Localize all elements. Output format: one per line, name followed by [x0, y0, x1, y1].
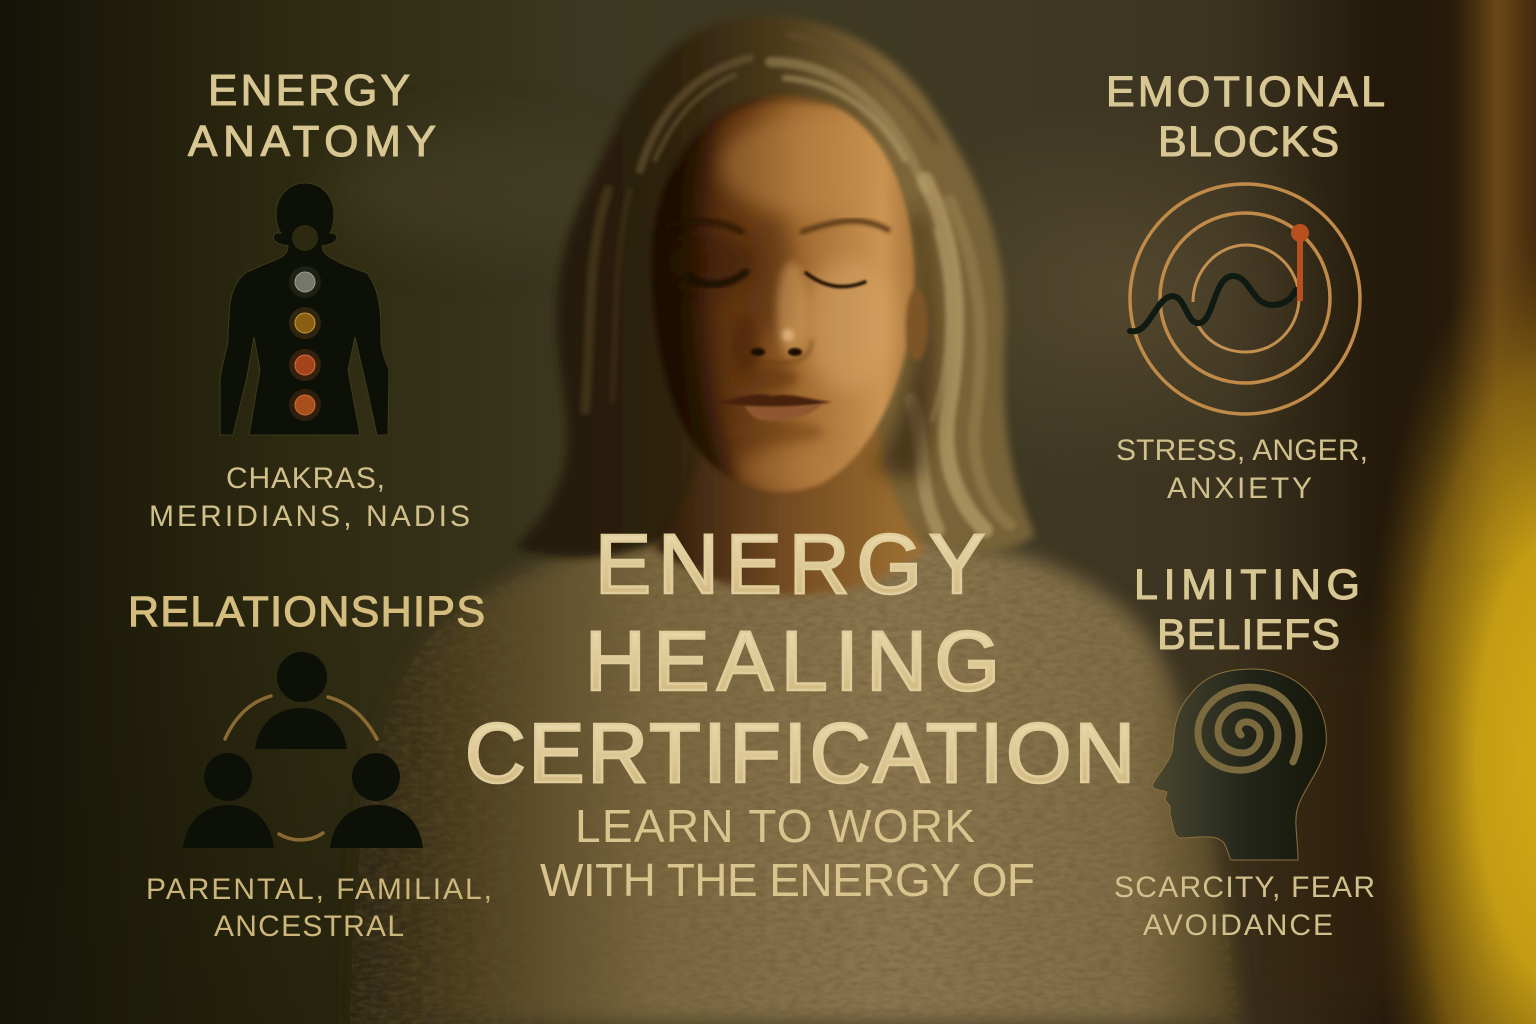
- caption: parental, familial, ancestral: [146, 873, 492, 943]
- subtitle: learn to work with the energy of: WITH THE ENERGY OF: [540, 854, 1035, 906]
- title: energy healing certification: ENERGY: [595, 517, 985, 611]
- brows: [668, 221, 888, 232]
- panel: emotional blocks: [1106, 68, 1385, 505]
- caption: parental, familial, ancestral: ANCESTRAL: [214, 910, 404, 943]
- shadow beside face: [875, 210, 935, 480]
- caption: chakras, meridians, nadis: CHAKRAS,: [226, 462, 385, 495]
- heading: emotional blocks: EMOTIONAL: [1106, 68, 1385, 116]
- hair strands: [585, 35, 1010, 530]
- heading: emotional blocks: [1106, 68, 1385, 166]
- icon: three people linked by arcs: [183, 652, 423, 848]
- caption: parental, familial, ancestral: PARENTAL, FAMILIAL,: [146, 873, 492, 906]
- subtitle: learn to work with the energy of: [540, 800, 1035, 906]
- caption: scarcity, fear, avoidance: SCARCITY, FEAR: [1114, 871, 1375, 904]
- lips: [716, 394, 832, 420]
- caption: scarcity, fear, avoidance: AVOIDANCE: [1143, 909, 1333, 942]
- panel: relationships: [128, 588, 492, 943]
- icon: body with chakras: [220, 183, 389, 435]
- heading: emotional blocks: BLOCKS: [1158, 118, 1339, 166]
- title: energy healing certification: HEALING: [585, 614, 1000, 708]
- icon: concentric rings with wave and pin: [1130, 184, 1360, 414]
- photo: woman with closed eyes: [350, 14, 1243, 1024]
- title: energy healing certification: [465, 517, 1135, 800]
- caption: scarcity, fear, avoidance: [1114, 871, 1375, 942]
- hair back: [515, 16, 1035, 558]
- sweater: [350, 536, 1243, 1024]
- icon: head profile with spiral: [1152, 669, 1326, 860]
- heading: limiting beliefs: LIMITING: [1134, 561, 1360, 609]
- caption: stress, anger, anxiety: ANXIETY: [1167, 472, 1312, 505]
- panel: energy anatomy: [149, 66, 470, 533]
- neck: [655, 430, 925, 594]
- caption: stress, anger, anxiety: STRESS, ANGER,: [1116, 434, 1368, 467]
- chakra dots: [289, 266, 321, 421]
- caption: chakras, meridians, nadis: MERIDIANS, NADIS: [149, 500, 470, 533]
- ear: [906, 289, 928, 361]
- nose outline: [740, 335, 812, 363]
- heading: limiting beliefs: BELIEFS: [1157, 611, 1340, 659]
- pin: [1297, 236, 1303, 301]
- heading: energy anatomy: [188, 66, 436, 166]
- wave: [1130, 276, 1296, 331]
- subtitle: learn to work with the energy of: LEARN TO WORK: [575, 800, 975, 852]
- title: energy healing certification: CERTIFICATION: [465, 706, 1135, 800]
- heading: limiting beliefs: [1134, 561, 1360, 659]
- caption: chakras, meridians, nadis: [149, 462, 470, 533]
- heading: energy anatomy: ANATOMY: [188, 117, 436, 166]
- closed eyes: [688, 272, 865, 287]
- panel: limiting beliefs: [1114, 561, 1375, 942]
- nostrils: [751, 348, 802, 356]
- heading: energy anatomy: ENERGY: [208, 66, 410, 115]
- neck opening: [292, 225, 318, 251]
- face: [650, 94, 916, 494]
- caption: stress, anger, anxiety: [1116, 434, 1368, 505]
- heading: relationships: RELATIONSHIPS: [128, 588, 485, 636]
